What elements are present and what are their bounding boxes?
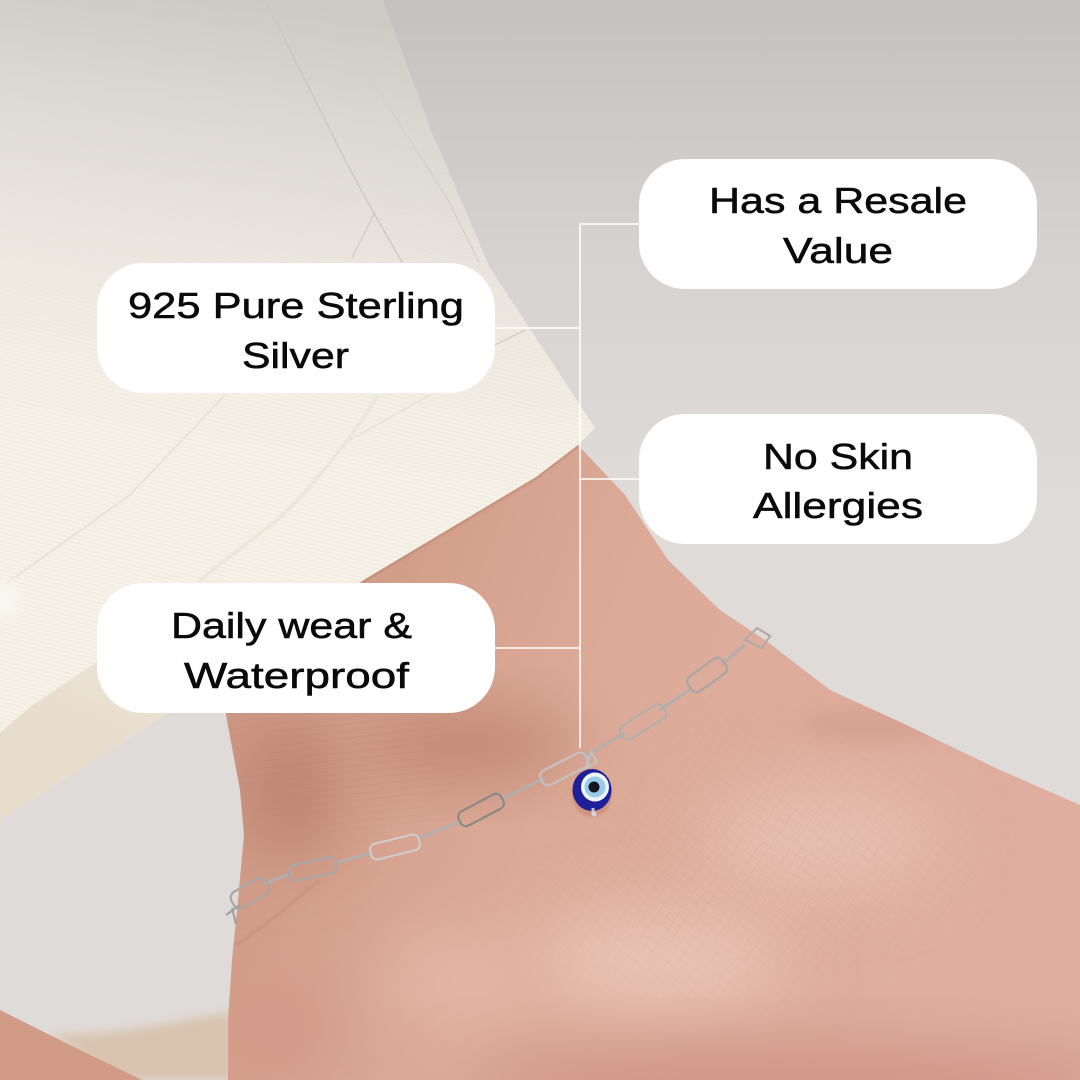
- heel crease: [236, 880, 320, 945]
- clasp left: [226, 905, 240, 924]
- anklet chain: [226, 628, 770, 924]
- callout: Has a Resale Value: Value: [783, 230, 893, 271]
- connector lines: [495, 224, 640, 748]
- callout: Has a Resale Value: [639, 159, 1037, 289]
- callout: No Skin Allergies: [639, 414, 1037, 544]
- evil eye charm: [572, 752, 612, 817]
- cuff underside: [0, 581, 212, 820]
- other leg: [0, 1010, 142, 1080]
- foot: [200, 430, 1080, 1080]
- trouser shadow on skin: [362, 445, 578, 581]
- seams and folds: [0, 0, 525, 588]
- callout: 925 Pure Sterling Silver: Silver: [242, 335, 349, 376]
- heel skin texture: [612, 792, 902, 967]
- twill weave: [0, 0, 600, 830]
- callout: Has a Resale Value: Has a Resale: [709, 180, 967, 221]
- callout: Daily wear & Waterproof: Daily wear &: [171, 605, 412, 646]
- callout: Daily wear & Waterproof: Waterproof: [184, 655, 410, 696]
- callout: 925 Pure Sterling Silver: 925 Pure Sterling: [128, 285, 464, 326]
- callout: Daily wear & Waterproof: [97, 583, 495, 713]
- rug in the background: [50, 1012, 232, 1080]
- fold highlight at hem: [0, 580, 18, 617]
- callout: No Skin Allergies: No Skin: [763, 436, 913, 477]
- callout: No Skin Allergies: Allergies: [753, 485, 923, 526]
- trouser cuff: [0, 0, 600, 830]
- clasp right: [745, 628, 770, 648]
- ankle skin texture: [311, 714, 405, 806]
- callout: 925 Pure Sterling Silver: [97, 263, 495, 393]
